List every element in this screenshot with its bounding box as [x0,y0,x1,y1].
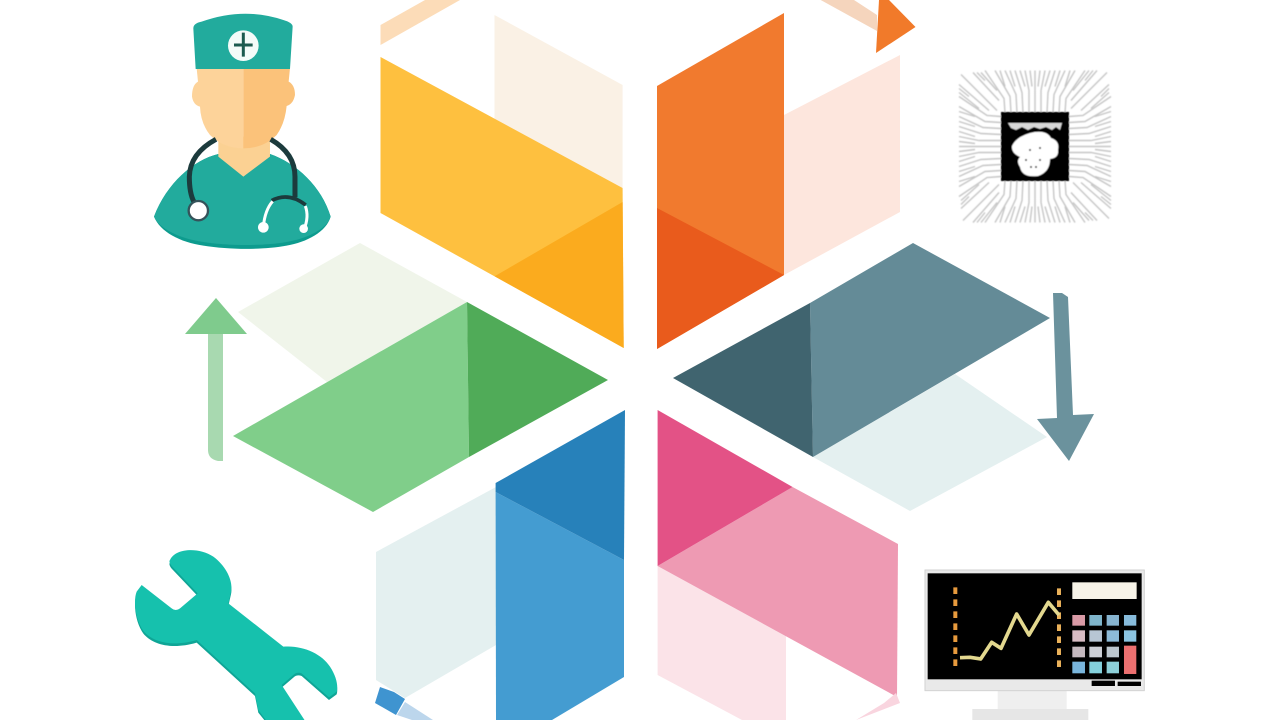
stethoscope [189,139,308,233]
faded pink face [658,566,786,720]
blue dark face [496,410,625,560]
calculator buttons [1072,615,1136,674]
icon: doctor [154,14,331,249]
monitor screen [928,573,1142,679]
panel: yellow segment [380,0,624,348]
doctor face [192,68,295,148]
calculator display [1072,582,1137,599]
panel: orange segment [657,13,900,349]
green dark face [467,302,608,457]
monitor stand [972,691,1088,720]
chip cloud specks [1025,147,1041,168]
faded green face [238,243,467,382]
panel: teal segment [673,243,1050,511]
pink main face [658,487,898,697]
orange dark face [657,208,784,349]
icon: monitor with chart and calculator [925,570,1144,720]
chip cloud [1012,132,1058,176]
faded blue face [376,487,496,698]
faded yellow face [494,15,623,188]
panel: pink segment [658,410,898,720]
yellow dark face [495,202,624,348]
faded teal face [813,374,1047,511]
chip top strip [1008,123,1062,130]
chip traces [959,70,1111,222]
faded orange face [784,55,900,275]
panel: blue segment [376,410,625,720]
green main face [233,302,469,512]
yellow main face [380,57,624,348]
pink dark face [658,410,793,566]
arrow: green up [185,298,247,461]
teal dark face [673,303,813,457]
chart dashed axes [955,587,1059,667]
monitor bezel [925,570,1144,691]
chip body [1001,112,1069,181]
chart line [960,602,1059,659]
blue main face [496,492,624,720]
doctor neck [218,137,270,177]
arrow: teal down [1037,293,1094,461]
arrow: blue stub [375,687,433,720]
doctor cap [193,14,293,69]
icon: wrench [135,550,337,720]
peach arrow stem [380,0,460,45]
orange main face [657,13,784,349]
doctor body [154,154,331,249]
arrow: orange top right [821,0,916,53]
panel: green segment [233,243,608,512]
teal main face [810,243,1050,457]
monitor status bars [1092,681,1141,686]
arrow: pink stub [856,693,900,720]
icon: chip with radiating lines [959,70,1111,222]
